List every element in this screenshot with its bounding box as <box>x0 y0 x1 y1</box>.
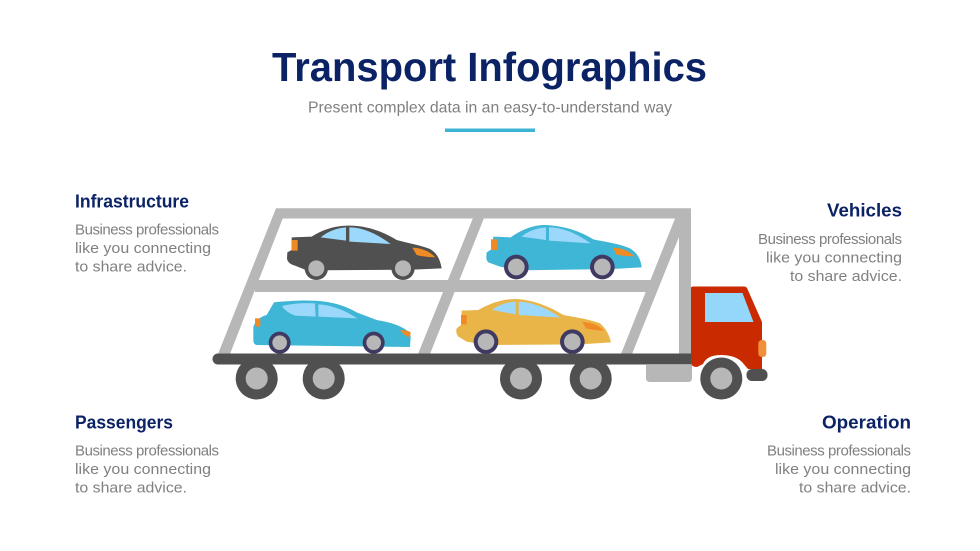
text block: Vehicles: like you connecting <box>766 250 902 266</box>
text block: Infrastructure: Infrastructure <box>75 192 189 212</box>
text block: Infrastructure: like you connecting <box>75 240 211 257</box>
text block: Passengers: like you connecting <box>75 461 211 478</box>
text block: Operation: Business professionals <box>767 442 911 460</box>
title accent line <box>445 128 535 132</box>
text block: Infrastructure <box>75 192 219 276</box>
text block: Vehicles: Business professionals <box>758 231 902 248</box>
trailer wheels <box>236 358 612 400</box>
chassis <box>212 354 692 364</box>
car: yellow <box>456 299 611 354</box>
text block: Vehicles: to share advice. <box>790 268 902 285</box>
text block: Infrastructure: to share advice. <box>75 258 187 276</box>
car: dark grey <box>287 226 442 280</box>
text block: Passengers <box>75 412 219 496</box>
text block: Infrastructure: Business professionals <box>75 222 219 238</box>
bumper <box>746 369 768 381</box>
text block: Passengers: Business professionals <box>75 442 219 460</box>
text block: Operation: like you connecting <box>775 461 911 478</box>
text block: Operation <box>767 412 911 496</box>
car: teal lower <box>253 300 411 354</box>
text block: Operation: to share advice. <box>799 480 911 496</box>
cab <box>691 286 762 369</box>
title: Transport Infographics <box>272 44 707 90</box>
cab window <box>705 293 754 322</box>
text block: Operation: Operation <box>822 412 911 432</box>
step <box>646 365 692 382</box>
cab light <box>758 340 766 357</box>
text block: Passengers: to share advice. <box>75 480 187 496</box>
text block: Passengers: Passengers <box>75 412 173 432</box>
cab wheel <box>700 358 742 400</box>
text block: Vehicles <box>758 200 902 285</box>
subtitle: Present complex data in an easy-to-understand way <box>308 100 672 116</box>
carrier frame <box>218 208 691 354</box>
text block: Vehicles: Vehicles <box>827 200 902 220</box>
car: teal upper <box>486 225 642 279</box>
truck <box>212 208 768 400</box>
